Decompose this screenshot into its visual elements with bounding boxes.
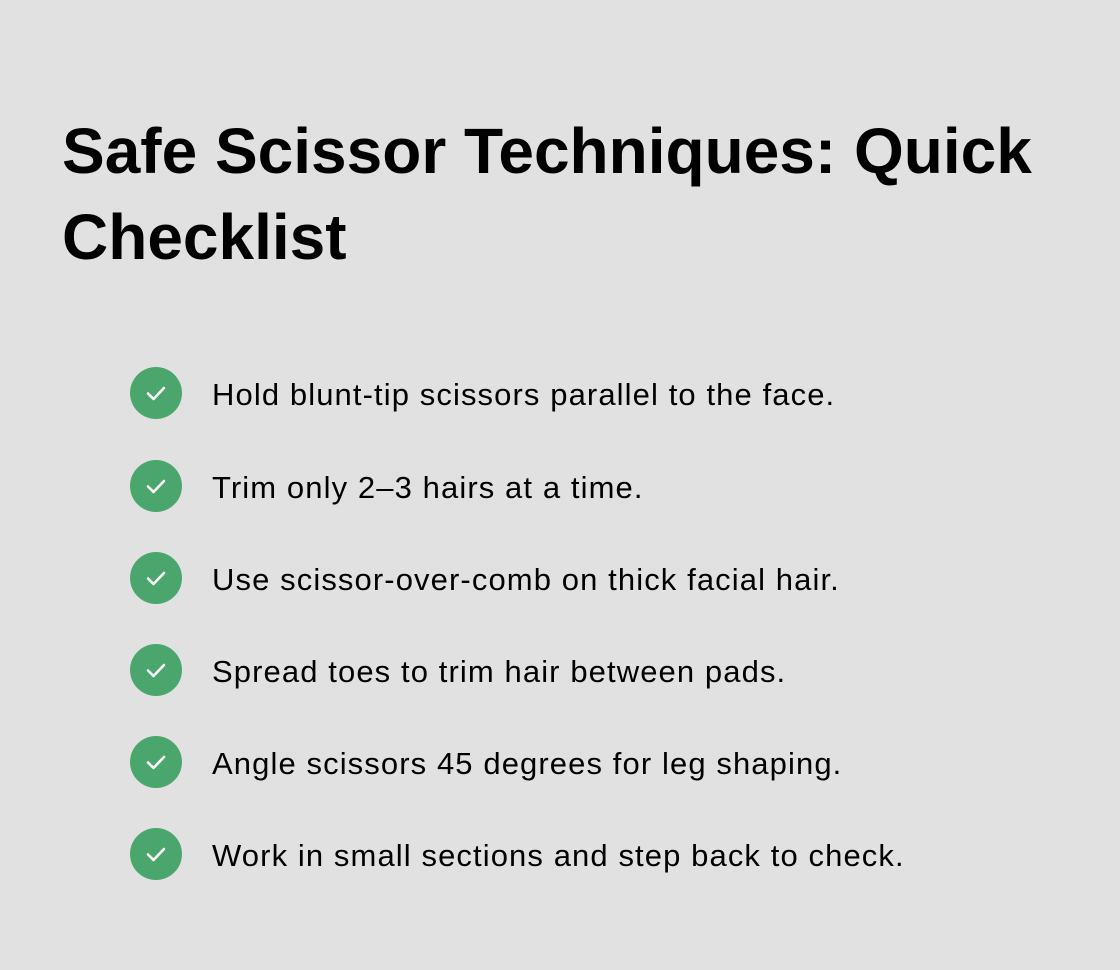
text: Work in small sections and step back to check.: [212, 838, 905, 873]
text: Use scissor-over-comb on thick facial hair.: [212, 562, 840, 597]
title: [62, 115, 1032, 273]
text: Angle scissors 45 degrees for leg shaping.: [212, 746, 842, 781]
icon: check: [130, 460, 182, 512]
icon: check: [130, 828, 182, 880]
text: Hold blunt-tip scissors parallel to the face.: [212, 377, 835, 412]
icon: check: [130, 736, 182, 788]
item 3: [130, 552, 840, 604]
item 6: [130, 828, 905, 880]
icon: check: [130, 367, 182, 419]
text: Trim only 2–3 hairs at a time.: [212, 470, 644, 505]
checklist: [130, 367, 905, 880]
title: Checklist: [62, 201, 347, 273]
item 5: [130, 736, 842, 788]
item 4: [130, 644, 786, 696]
icon: check: [130, 552, 182, 604]
item 2: [130, 460, 644, 512]
icon: check: [130, 644, 182, 696]
text: Spread toes to trim hair between pads.: [212, 654, 786, 689]
title: Safe Scissor Techniques: Quick: [62, 115, 1032, 187]
item 1: [130, 367, 835, 419]
